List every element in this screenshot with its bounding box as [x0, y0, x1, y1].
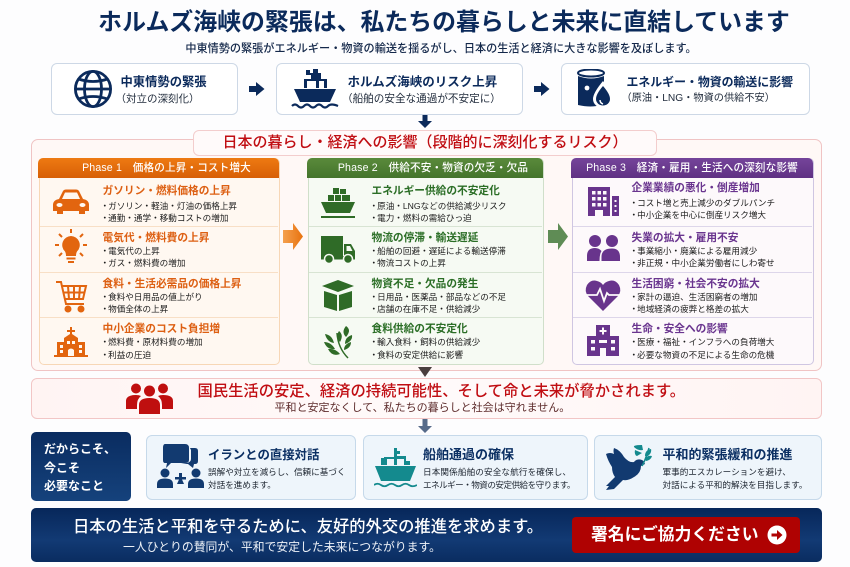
icon: arrow circle [767, 525, 787, 545]
title: ホルムズ海峡の緊張は、私たちの暮らしと未来に直結しています [98, 9, 790, 36]
card text: 対話を進めます。 [208, 480, 276, 490]
card: direct dialogue [146, 435, 356, 500]
panel: national impact banner [31, 378, 822, 419]
row: gasoline [53, 184, 237, 222]
icon: box [322, 280, 354, 311]
bullet: ・地域経済の疲弊と格差の拡大 [630, 304, 749, 314]
card: de-escalation [594, 435, 822, 500]
phase 3 header: Phase 3 経済・雇用・生活への深刻な影響 [586, 162, 798, 174]
icon: factory building [54, 327, 88, 357]
button label: 署名にご協力ください [591, 525, 758, 544]
card text: 日本関係船舶の安全な航行を確保し、 [423, 466, 571, 476]
icon: globe [74, 70, 112, 108]
bullet: ・家計の逼迫、生活困窮者の増加 [630, 292, 757, 302]
bullet: ・店舗の在庫不足・供給減少 [370, 304, 480, 314]
sub message: 平和と安定なくして、私たちの暮らしと社会は守れません。 [274, 402, 570, 414]
phase 2 header: Phase 2 供給不安・物資の欠乏・欠品 [338, 162, 528, 174]
text: unstable passage: （船舶の安全な通過が不安定に） [342, 92, 501, 104]
card text: 軍事的エスカレーションを避け、 [662, 466, 791, 476]
card title: イランとの直接対話 [208, 448, 319, 462]
row: SME costs [40, 316, 278, 362]
heading: impact on Japan [193, 130, 657, 156]
icon: group of people [126, 382, 173, 414]
bullet: ・物価全体の上昇 [100, 304, 168, 314]
icon: hospital [582, 320, 622, 360]
arrow [534, 82, 550, 96]
arrow [249, 82, 264, 96]
row title: 物資不足・欠品の発生 [372, 278, 478, 290]
bullet: ・食料の安定供給に影響 [370, 350, 463, 360]
row title: 食料・生活必需品の価格上昇 [102, 278, 241, 290]
panel: energy transport [561, 63, 810, 115]
row title: ガソリン・燃料価格の上昇 [102, 184, 231, 196]
bullet: ・コスト増と売上減少のダブルパンチ [630, 198, 775, 208]
card text: 対話による平和的解決を目指します。 [662, 480, 807, 490]
icon: cargo ship [291, 69, 338, 109]
bullet: ・利益の圧迫 [100, 350, 151, 360]
arrow: down to national impact [418, 367, 432, 377]
heading: Middle East tension: 中東情勢の緊張 [120, 74, 207, 88]
phase 3 header [571, 158, 813, 178]
bullet: ・事業縮小・廃業による雇用減少 [630, 246, 757, 256]
row: business [588, 182, 775, 220]
icon: people [587, 235, 620, 261]
row: electricity [40, 226, 278, 272]
bullet: ・中小企業を中心に倒産リスク増大 [630, 210, 766, 220]
bullet: ・物流コストの上昇 [370, 258, 446, 268]
text: every voice: 一人ひとりの賛同が、平和で安定した未来につながります。 [123, 540, 441, 554]
card text [423, 466, 575, 492]
panel: impact on Japan [31, 139, 822, 371]
row title: 電気代・燃料費の上昇 [102, 232, 209, 244]
bullet: ・食料や日用品の値上がり [100, 292, 203, 302]
row: energy supply [321, 184, 506, 222]
text: deepening conflict: （対立の深刻化） [116, 92, 200, 104]
bullet: ・必要な物資の不足による生命の危機 [630, 350, 774, 360]
text: supply concerns: （原油・LNG・物資の供給不安） [622, 92, 775, 104]
card text: 誤解や対立を減らし、信頼に基づく [208, 466, 346, 476]
icon: car [53, 190, 89, 214]
row: shortages [308, 272, 542, 318]
card text: エネルギー・物資の安定供給を守ります。 [423, 480, 575, 490]
icon: wheat [324, 326, 352, 358]
bullet: ・船舶の回避・遅延による輸送停滞 [370, 246, 506, 256]
bullet: ・原油・LNGなどの供給減少リスク [370, 200, 506, 210]
bullet: ・ガソリン・軽油・灯油の価格上昇 [100, 200, 237, 210]
bullet: ・電力・燃料の需給ひっ迫 [370, 212, 472, 222]
icon: heart with pulse [582, 274, 622, 314]
icon: truck [321, 236, 355, 263]
text: why now: 必要なこと [44, 479, 104, 493]
heading: Hormuz strait risk: ホルムズ海峡のリスク上昇 [348, 74, 497, 88]
card: safe passage [362, 435, 588, 500]
icon: dialogue [157, 442, 204, 488]
main message: 国民生活の安定、経済の持続可能性、そして命と未来が脅かされます。 [198, 382, 685, 400]
card title: 平和的緊張緩和の推進 [662, 446, 793, 462]
phase 1 header [38, 158, 279, 178]
row: unemployment [572, 226, 812, 272]
button: sign [572, 517, 800, 553]
arrow: phase 2 to phase 3 [548, 223, 568, 250]
row title: 生活困窮・社会不安の拡大 [632, 278, 760, 290]
bullet: ・日用品・医薬品・部品などの不足 [370, 292, 506, 302]
arrow: down to actions [418, 419, 432, 433]
arrow: down to impacts [418, 115, 432, 128]
heading: impact on Japan: 日本の暮らし・経済への影響（段階的に深刻化するリスク） [222, 134, 628, 151]
card text [208, 466, 346, 492]
phase 2 header [307, 158, 543, 178]
icon: oil barrel and drop [577, 69, 610, 106]
panel: Middle East tension [51, 63, 238, 115]
bullet: ・通勤・通学・移動コストの増加 [100, 212, 228, 222]
heading: energy transport: エネルギー・物資の輸送に影響 [626, 74, 793, 88]
panel: Hormuz strait risk [276, 63, 523, 115]
row title: エネルギー供給の不安定化 [372, 184, 500, 196]
phase 1 header: Phase 1 価格の上昇・コスト増大 [82, 162, 251, 174]
text: why now [44, 440, 116, 496]
icon: ship [321, 188, 355, 218]
arrow: phase 1 to phase 2 [283, 223, 303, 250]
text: why now: 今こそ [44, 460, 80, 474]
row: food supply [308, 316, 542, 362]
heading: call to action: 日本の生活と平和を守るために、友好的外交の推進を求めます。 [73, 518, 543, 536]
row: logistics [308, 226, 542, 272]
bullet: ・医療・福祉・インフラへの負荷増大 [630, 336, 774, 346]
row title: 食料供給の不安定化 [372, 322, 468, 334]
bullet: ・輸入食料・飼料の供給減少 [370, 336, 480, 346]
bullet: ・電気代の上昇 [100, 246, 160, 256]
row title: 失業の拡大・雇用不安 [632, 232, 738, 244]
subtitle: 中東情勢の緊張がエネルギー・物資の輸送を揺るがし、日本の生活と経済に大きな影響を及ぼします。 [185, 42, 697, 54]
panel: phase 1 [38, 158, 280, 364]
panel: why now [31, 432, 131, 501]
bullet: ・ガス・燃料費の増加 [100, 258, 185, 268]
card title: 船舶通過の確保 [423, 446, 514, 462]
panel: phase 3 [572, 158, 814, 364]
row: life and safety [572, 316, 812, 362]
row title: 物流の停滞・輸送遅延 [372, 232, 478, 244]
row title: 中小企業のコスト負担増 [102, 322, 220, 334]
icon: dove with olive branch [605, 445, 653, 492]
row title: 企業業績の悪化・倒産増加 [632, 182, 760, 194]
icon: shopping cart [56, 281, 88, 312]
row: food [40, 272, 278, 318]
icon: light bulb [55, 229, 87, 263]
icon: teal ship [374, 447, 416, 488]
card text [662, 466, 807, 492]
row: hardship [572, 272, 812, 318]
row title: 生命・安全への影響 [632, 322, 728, 334]
bullet: ・非正規・中小企業労働者にしわ寄せ [630, 258, 775, 268]
text: why now: だからこそ、 [44, 442, 116, 456]
icon: office buildings [588, 187, 619, 216]
panel: call to action [31, 508, 822, 562]
panel: phase 2 [308, 158, 544, 364]
bullet: ・燃料費・原材料費の増加 [100, 336, 203, 346]
